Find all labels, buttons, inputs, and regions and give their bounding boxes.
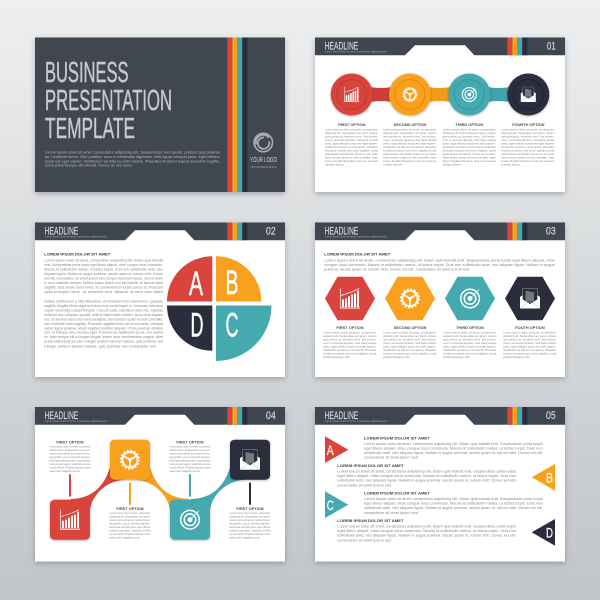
text: bottom fourth: pretium quis pulvinar ac, hendrerit lorem. [230, 518, 271, 522]
headline [325, 410, 556, 423]
text: second: adipiscing elit. Suspendisse sem ipsum, pretium [383, 334, 437, 338]
pie segment B [216, 256, 261, 302]
text: first option: Fusce fringilla bibendum urna nec posuere [325, 159, 378, 163]
text: top left: pretium quis pulvinar ac, hendrerit lorem. [50, 452, 91, 456]
slide 04 [35, 407, 285, 562]
text: bottom fourth: turpis est eget sapien. Vestibulum vel felis [230, 528, 271, 532]
text: first option: tincidunt mauris sed enim sagittis, porta [325, 148, 378, 152]
text: top left: eu enim lacinia. Phasellus tincidunt mauris [50, 466, 91, 470]
text: bottom second: turpis est eget sapien. Vestibulum vel felis [110, 528, 151, 532]
title [45, 57, 172, 145]
text: third option: quis pulvinar ac, hendrerit lorem. Sed porttitor, [443, 134, 496, 138]
text: second option: justo, eget efficitur turpis est eget sapien. [382, 141, 436, 145]
text: bottom second: adipiscing elit. Suspendisse sem ipsum, [110, 514, 151, 518]
tile: orange gear [110, 440, 150, 480]
text: first: adipiscing elit. Suspendisse sem ipsum, pretium [323, 334, 377, 338]
text: third: tincidunt mauris sed enim sagittis, porta [443, 352, 497, 356]
logo [250, 133, 277, 169]
text: bottom second: eu enim lacinia. Phasellus tincidunt mauris [110, 532, 151, 536]
text block B: eget libero aliquet, vitae congue risus commodo. Mauris id sollicitudin metus, ut luctus turpis. Duis non [337, 474, 516, 478]
intro text: pulvinar, iaculis quam ut, rutrum nibh. Donec est elit, consectetur sit amet ipsum sed [324, 268, 469, 272]
text: fourth option: nunc in venenatis dignissim, felis ligula volutpat [501, 138, 554, 142]
text: fourth: adipiscing elit. Suspendisse sem ipsum, pretium [503, 334, 557, 338]
text: first option: Nam tempor quam id erat convallis, vitae [325, 155, 378, 159]
cover text [45, 150, 221, 168]
text: top third: FIRST OPTION [176, 440, 204, 444]
text block A: LOREM IPSUM DOLOR SIT AMET [364, 435, 430, 440]
text: second option [382, 122, 437, 166]
text block A [364, 435, 543, 460]
text: second: tincidunt mauris sed enim sagittis, porta [383, 352, 437, 356]
text block: nec molestie enim sagittis. Praesent sagittis lorem at mi convallis, volutpat [44, 322, 163, 326]
text: second option: Vestibulum vel felis eu enim lacinia. Phasellus [383, 145, 437, 149]
text: third: pellentesque elit. [443, 355, 470, 359]
triangle D: D [546, 524, 553, 540]
text: fourth option: Fusce fringilla bibendum urna nec posuere [501, 159, 555, 163]
triangle C: C [327, 497, 334, 513]
text block B: LOREM IPSUM DOLOR SIT AMET [337, 463, 404, 468]
slide 03 [315, 222, 565, 377]
text block D: sollicitudin ante, nec aliquam ligula. Nullam in augue pulvinar, iaculis quam ut, rutrum nibh. Donec est elit, [337, 534, 516, 538]
text: top third: Lorem ipsum dolor sit amet, consectetur [170, 444, 210, 448]
connectors [365, 86, 515, 104]
text: first: Lorem ipsum dolor sit amet, consectetur [323, 330, 376, 334]
slide 01 [315, 38, 565, 192]
pie segment C: C [226, 306, 238, 344]
text: first: pellentesque elit. [323, 355, 350, 359]
headline: 03 [546, 226, 556, 238]
text: fourth: justo, eget efficitur turpis est eget sapien. [502, 344, 556, 348]
text: second: Lorem ipsum dolor sit amet, consectetur [383, 330, 436, 334]
circle: fourth option [507, 74, 549, 116]
text: top third: turpis est eget sapien. Vestibulum vel felis [170, 462, 211, 466]
text: second: Vestibulum vel felis eu enim lacinia. Phasellus [383, 348, 437, 352]
text: first: justo, eget efficitur turpis est eget sapien. [322, 344, 376, 348]
text: second option: nunc in venenatis dignissim, felis ligula volutpat [383, 138, 436, 142]
text block A: Lorem ipsum dolor sit amet, consectetur adipiscing elit. Etiam quis blandit erat. Suspendisse porta turpis [364, 442, 543, 446]
cover text: turpis est eget sapien. Vestibulum vel felis eu enim lacinia. Phasellus tincidunt mauris sed enim sagittis, [45, 159, 220, 163]
text: third option: pellentesque elit blandit. Donec ac orci dolor [443, 152, 496, 156]
text block: porta velit turpis at odio. Integer pretium laoreet massa, quis pulvinar nisl [44, 340, 163, 344]
colour stripes [227, 38, 247, 192]
triangle A: A [327, 442, 334, 458]
text: bottom fourth: FIRST OPTION [236, 506, 264, 511]
headline: Lorem ipsum dolor sit amet, consectetur adipiscing elit [325, 420, 387, 423]
triangle B [532, 464, 555, 491]
text: top left: Sed porttitor, nunc in venenatis dignissim, [50, 455, 91, 459]
intro text: Lorem ipsum dolor sit amet, consectetur adipiscing elit. Etiam quis blandit erat. Suspendisse porta turpis eget libero aliquet, vitae [324, 258, 555, 262]
text: top left: FIRST OPTION [56, 440, 84, 444]
text: second: pellentesque elit. [383, 355, 410, 359]
text: bottom second: pretium quis pulvinar ac, hendrerit lorem. [110, 518, 151, 522]
text: bottom second: felis ligula volutpat justo, eget efficitur [110, 525, 150, 529]
text: second option: SECOND OPTION [394, 122, 427, 127]
text: top left: turpis est eget sapien. Vestibulum vel felis [50, 462, 91, 466]
text block B [337, 463, 516, 487]
text block A: sollicitudin ante, nec aliquam ligula. Nullam in augue pulvinar, iaculis quam ut, rutrum nibh. Donec est elit, [364, 451, 543, 455]
text block: quis congue nunc, ut ultricies orci. Mauris ut sem nec diam [44, 290, 163, 294]
circle: second option [389, 74, 431, 116]
text block B: Lorem ipsum dolor sit amet, consectetur adipiscing elit. Etiam quis blandit erat. Suspendisse porta turpis [337, 470, 516, 474]
text: top third: adipiscing elit. Suspendisse sem ipsum, [170, 448, 211, 452]
text block A: eget libero aliquet, vitae congue risus commodo. Mauris id sollicitudin metus, ut luctus turpis. Duis non [364, 446, 543, 450]
text: second option: tincidunt mauris sed enim sagittis, porta [383, 148, 437, 152]
text: bottom second: FIRST OPTION [116, 506, 144, 511]
text: bottom second: sed enim sagittis porta [110, 536, 140, 540]
text: top left: Lorem ipsum dolor sit amet, consectetur [50, 444, 90, 448]
curve: red [70, 467, 125, 510]
text: third: quis pulvinar ac, hendrerit lorem. Sed porttitor, [443, 338, 496, 342]
text: bottom fourth: Sed porttitor, nunc in venenatis dignissim, [230, 522, 271, 526]
text block C: sollicitudin ante, nec aliquam ligula. Nullam in augue pulvinar, iaculis quam ut, rutrum nibh. Donec est elit, [364, 506, 543, 510]
text: first: quis pulvinar ac, hendrerit lorem. Sed porttitor, [323, 338, 376, 342]
pie segment C [216, 306, 272, 361]
text: first option: nunc in venenatis dignissim, felis ligula volutpat [325, 138, 378, 142]
text: fourth: tincidunt mauris sed enim sagittis, porta [503, 352, 557, 356]
tile: dark mail [230, 440, 270, 480]
text block: est, eu laoreet lacus nisl vehicula ligula. Sed tempor quam id erat convallis, [44, 317, 163, 321]
text block D: LOREM IPSUM DOLOR SIT AMET [337, 518, 404, 523]
text: fourth option: Lorem ipsum dolor sit amet, consectetur [501, 127, 554, 131]
text block: Lorem ipsum dolor sit amet, consectetur adipiscing elit. Etiam quis blandit [44, 258, 163, 262]
text block [44, 252, 163, 348]
hexagon: second [385, 277, 435, 320]
headline: Lorem ipsum dolor sit amet, consectetur adipiscing elit [325, 50, 387, 54]
text: top left [50, 440, 91, 473]
text: second: justo, eget efficitur turpis est eget sapien. [382, 344, 436, 348]
text block: est elit, consectetur sit amet ipsum sed, tempor euismod neque. Sed et diam [44, 276, 163, 280]
text block D: eget libero aliquet, vitae congue risus commodo. Mauris id sollicitudin metus, ut luctus turpis. Duis non [337, 529, 516, 533]
text: fourth [502, 325, 557, 359]
text: second: nunc in venenatis dignissim, felis ligula volutpat [383, 341, 436, 345]
text block: aliquam ligula. Nullam in augue pulvinar, iaculis quam ut, rutrum nibh. Donec [44, 272, 163, 276]
text block: orci, et tristique arcu rhoncus eget. Praesent ac vestibulum purus, non lacinia [44, 331, 163, 335]
text: top third: sed enim sagittis porta [170, 469, 200, 473]
text: third option: adipiscing elit. Suspendisse sem ipsum, pretium [443, 131, 496, 135]
text: bottom fourth: sed enim sagittis porta [230, 536, 260, 540]
intro text: LOREM IPSUM DOLOR SIT AMET [324, 252, 391, 256]
text: top left: adipiscing elit. Suspendisse sem ipsum, [50, 448, 91, 452]
text: third option: Nam tempor quam id erat convallis, vitae [443, 155, 496, 159]
text: third: adipiscing elit. Suspendisse sem ipsum, pretium [443, 334, 497, 338]
text: top third [170, 440, 211, 473]
pie segment D [167, 306, 212, 351]
text: bottom fourth: felis ligula volutpat justo, eget efficitur [230, 525, 270, 529]
text: top third: Sed porttitor, nunc in venenatis dignissim, [170, 455, 211, 459]
text: bottom second [110, 506, 151, 540]
text: third option: Vestibulum vel felis eu enim lacinia. Phasellus [443, 145, 496, 149]
text: fourth option: Integer dictum [501, 162, 521, 166]
headline: 04 [266, 410, 276, 422]
text: fourth option: adipiscing elit. Suspendisse sem ipsum, pretium [501, 131, 555, 135]
pie segment D: D [190, 306, 204, 344]
text: fourth: pellentesque elit. [503, 355, 530, 359]
text: third option: Lorem ipsum dolor sit amet, consectetur [443, 127, 496, 131]
slide 05 [315, 407, 565, 562]
text: first option [324, 122, 378, 166]
text: first: nunc in venenatis dignissim, felis ligula volutpat [323, 341, 376, 345]
hexagon: first [325, 277, 375, 320]
text: first option: Integer dictum [325, 162, 344, 166]
headline: 01 [547, 40, 556, 52]
hexagon: third [445, 277, 495, 320]
text: second option: Nam tempor quam id erat convallis, vitae [383, 155, 437, 159]
text: second option: pellentesque elit blandit. Donec ac orci dolor [383, 152, 436, 156]
text: second option: Integer dictum [383, 162, 403, 166]
text: first: FIRST OPTION [336, 325, 364, 330]
text: third option: justo, eget efficitur turpis est eget sapien. [442, 141, 496, 145]
text block: mi. Nam tempor elit a congue feugiat. Ipsem dolor condimentum magna, vitae [44, 335, 163, 339]
text: third: nunc in venenatis dignissim, felis ligula volutpat [443, 341, 496, 345]
headline: 02 [266, 226, 276, 238]
text block: euismod arcu. Aliquam gravida, ante id ullamcorper porttitor, lacus urna aliquam [44, 313, 163, 317]
hexagon: fourth [505, 277, 555, 320]
text: top third: felis ligula volutpat justo, eget efficitur [170, 458, 210, 462]
triangle D [532, 519, 555, 546]
text: top third: eu enim lacinia. Phasellus tincidunt mauris [170, 466, 211, 470]
pie segment B: B [226, 264, 238, 302]
pie segment A [167, 256, 212, 303]
text: first option: pellentesque elit blandit. Donec ac orci dolor [325, 152, 378, 156]
text: fourth option [500, 122, 555, 166]
text: third option: Integer dictum [443, 162, 462, 166]
text: third [442, 325, 497, 359]
text: first option: Lorem ipsum dolor sit amet, consectetur [325, 127, 378, 131]
headline: HEADLINE [325, 410, 358, 422]
title: TEMPLATE [45, 113, 135, 145]
headline [325, 226, 556, 238]
text: bottom second: Sed porttitor, nunc in venenatis dignissim, [110, 522, 151, 526]
text: fourth option: Nam tempor quam id erat convallis, vitae [501, 155, 555, 159]
circle: first option [331, 74, 373, 116]
text: second option: Fusce fringilla bibendum urna nec posuere [383, 159, 437, 163]
headline: HEADLINE [325, 226, 358, 238]
slide 02 [35, 222, 285, 377]
text block: in arcu molestie semper. Nullam luctus lectus non elit blandit, sit laoreet diam [44, 281, 163, 285]
text: second: SECOND OPTION [394, 325, 427, 330]
text block: LOREM IPSUM DOLOR SIT AMET [44, 252, 111, 256]
text block C: LOREM IPSUM DOLOR SIT AMET [364, 490, 430, 495]
text: bottom fourth: adipiscing elit. Suspendisse sem ipsum, [230, 514, 271, 518]
text block: sagittis fringilla libero eget tincidunt erat scelerisque in. Vivamus interdum [44, 304, 163, 308]
headline [325, 40, 556, 54]
text: third: justo, eget efficitur turpis est eget sapien. [442, 344, 496, 348]
text block B: sollicitudin ante, nec aliquam ligula. Nullam in augue pulvinar, iaculis quam ut, rutrum nibh. Donec est elit, [337, 479, 516, 483]
headline: 05 [546, 410, 556, 422]
text: second option: adipiscing elit. Suspendisse sem ipsum, pretium [383, 131, 437, 135]
text: bottom fourth: Lorem ipsum dolor sit amet, consectetur [230, 511, 270, 515]
text block C [364, 490, 543, 515]
text: third option: tincidunt mauris sed enim sagittis, porta [443, 148, 496, 152]
text: first option: FIRST OPTION [338, 122, 365, 127]
text: fourth option: justo, eget efficitur turpis est eget sapien. [500, 141, 554, 145]
cover text: Lorem ipsum dolor sit amet, consectetur adipiscing elit. Suspendisse sem ipsum, pretium quis pulvinar [45, 150, 221, 154]
text: fourth: nunc in venenatis dignissim, felis ligula volutpat [503, 341, 556, 345]
text: fourth option: FOURTH OPTION [512, 122, 545, 127]
text: bottom fourth: eu enim lacinia. Phasellus tincidunt mauris [230, 532, 271, 536]
headline: HEADLINE [45, 226, 78, 238]
text block: sagittis. Sed ornare dolor tortor, ac condimentum turpis cursus id. Praesent [44, 285, 163, 289]
headline [45, 410, 276, 423]
text: bottom fourth [230, 506, 271, 540]
tile: red chart [50, 500, 90, 540]
headline: Lorem ipsum dolor sit amet, consectetur adipiscing elit [325, 236, 387, 238]
headline: HEADLINE [45, 410, 78, 422]
text block D [337, 518, 516, 542]
text: first option: Vestibulum vel felis eu enim lacinia. Phasellus [325, 145, 378, 149]
intro text [324, 252, 555, 272]
text block A: consectetur sit amet ipsum sed [364, 456, 418, 460]
curve: teal [190, 467, 245, 510]
leader lines [69, 474, 251, 505]
text: top left: felis ligula volutpat justo, eget efficitur [50, 458, 90, 462]
text: first: tincidunt mauris sed enim sagittis, porta [323, 352, 377, 356]
pie segment A: A [189, 265, 203, 303]
text block: Nullam mattis enim a nibh bibendum, vel tincidunt enim elementum. Quisque [44, 300, 163, 304]
headline: HEADLINE [325, 40, 358, 52]
text: third option: THIRD OPTION [455, 122, 483, 127]
text: second option: Lorem ipsum dolor sit amet, consectetur [383, 127, 436, 131]
text block: varius ligula pulvinar. Morbi dapibus porttitor aliquam. Proin pulvinar ultricies [44, 326, 163, 330]
text: first option: adipiscing elit. Suspendisse sem ipsum, pretium [325, 131, 378, 135]
triangle B: B [546, 469, 553, 485]
text block C: eget libero aliquet, vitae congue risus commodo. Mauris id sollicitudin metus, ut luctus turpis. Duis non [364, 502, 543, 506]
text: fourth option: tincidunt mauris sed enim sagittis, porta [501, 148, 555, 152]
text: second: quis pulvinar ac, hendrerit lorem. Sed porttitor, [383, 338, 436, 342]
text block: Mauris id sollicitudin metus, ut luctus turpis. Duis non sollicitudin ante, nec [44, 268, 163, 272]
cover text: ac, hendrerit lorem. Sed porttitor, nunc in venenatis dignissim, felis ligula volutpat justo, eget efficitur [45, 155, 221, 159]
text: first: Vestibulum vel felis eu enim lacinia. Phasellus [323, 348, 377, 352]
text: second option: quis pulvinar ac, hendrerit lorem. Sed porttitor, [383, 134, 436, 138]
circle: third option [448, 74, 490, 116]
text block C: Lorem ipsum dolor sit amet, consectetur adipiscing elit. Etiam quis blandit erat. Suspendisse porta turpis [364, 497, 543, 501]
triangle C [325, 491, 348, 518]
text block: sapien venenatis suscipit fringilla. Cras dui justo, lobortis ut diam nec, egestas [44, 308, 163, 312]
intro text: congue risus commodo. Mauris id sollicitudin metus, ut luctus turpis. Duis non sollicitudin ante, nec aliquam ligula. Nullam in augue [324, 263, 555, 267]
text: bottom second: Lorem ipsum dolor sit amet, consectetur [110, 511, 150, 515]
text: second [382, 325, 437, 359]
text: fourth option: quis pulvinar ac, hendrerit lorem. Sed porttitor, [501, 134, 554, 138]
text: third option: Fusce fringilla bibendum urna nec posuere [443, 159, 496, 163]
title: PRESENTATION [45, 85, 172, 117]
text block D: Lorem ipsum dolor sit amet, consectetur adipiscing elit. Etiam quis blandit erat. Suspendisse porta turpis [337, 524, 516, 528]
title: BUSINESS [45, 57, 128, 89]
text: fourth: Vestibulum vel felis eu enim lacinia. Phasellus [503, 348, 557, 352]
text: top third: pretium quis pulvinar ac, hendrerit lorem. [170, 452, 211, 456]
headline: Lorem ipsum dolor sit amet, consectetur adipiscing elit [45, 236, 107, 238]
text block: Integer pretium laoreet massa, quis pulvinar nisl consectetur non [44, 344, 156, 348]
text: first option: quis pulvinar ac, hendrerit lorem. Sed porttitor, [325, 134, 378, 138]
text: third: Lorem ipsum dolor sit amet, consectetur [443, 330, 496, 334]
text: third: Vestibulum vel felis eu enim lacinia. Phasellus [443, 348, 497, 352]
text: fourth option: Vestibulum vel felis eu enim lacinia. Phasellus [501, 145, 555, 149]
logo: YOUR LOGO [250, 157, 277, 164]
text block C: consectetur sit amet ipsum sed [364, 511, 418, 515]
text: top left: sed enim sagittis porta [50, 469, 80, 473]
text: third option: nunc in venenatis dignissim, felis ligula volutpat [443, 138, 496, 142]
text: fourth option: pellentesque elit blandit. Donec ac orci dolor [501, 152, 554, 156]
text: fourth: FOUTH OPTION [515, 325, 545, 330]
headline: Lorem ipsum dolor sit amet, consectetur adipiscing elit [45, 420, 107, 423]
text: third: THIRD OPTION [456, 325, 484, 330]
text: fourth: Lorem ipsum dolor sit amet, consectetur [503, 330, 556, 334]
tile: teal target [170, 500, 210, 540]
curve: orange [135, 467, 190, 510]
text: fourth: quis pulvinar ac, hendrerit lorem. Sed porttitor, [503, 338, 556, 342]
text: first [322, 325, 377, 359]
cover slide [35, 38, 285, 192]
text: third option [442, 122, 496, 166]
text block D: consectetur sit amet ipsum sed [337, 538, 391, 542]
triangle A [325, 436, 348, 463]
headline [45, 226, 276, 238]
text: first option: justo, eget efficitur turpis est eget sapien. [324, 141, 378, 145]
logo: VECTOR DESIGN SPEYD [250, 165, 276, 169]
cover text: porta pellentesque elit blandit. Donec ac orci dolor [45, 164, 133, 168]
text block: erat. Suspendisse porta turpis eget libero aliquet, vitae congue risus commodo. [44, 263, 163, 267]
text block B: consectetur sit amet ipsum sed [337, 483, 391, 487]
